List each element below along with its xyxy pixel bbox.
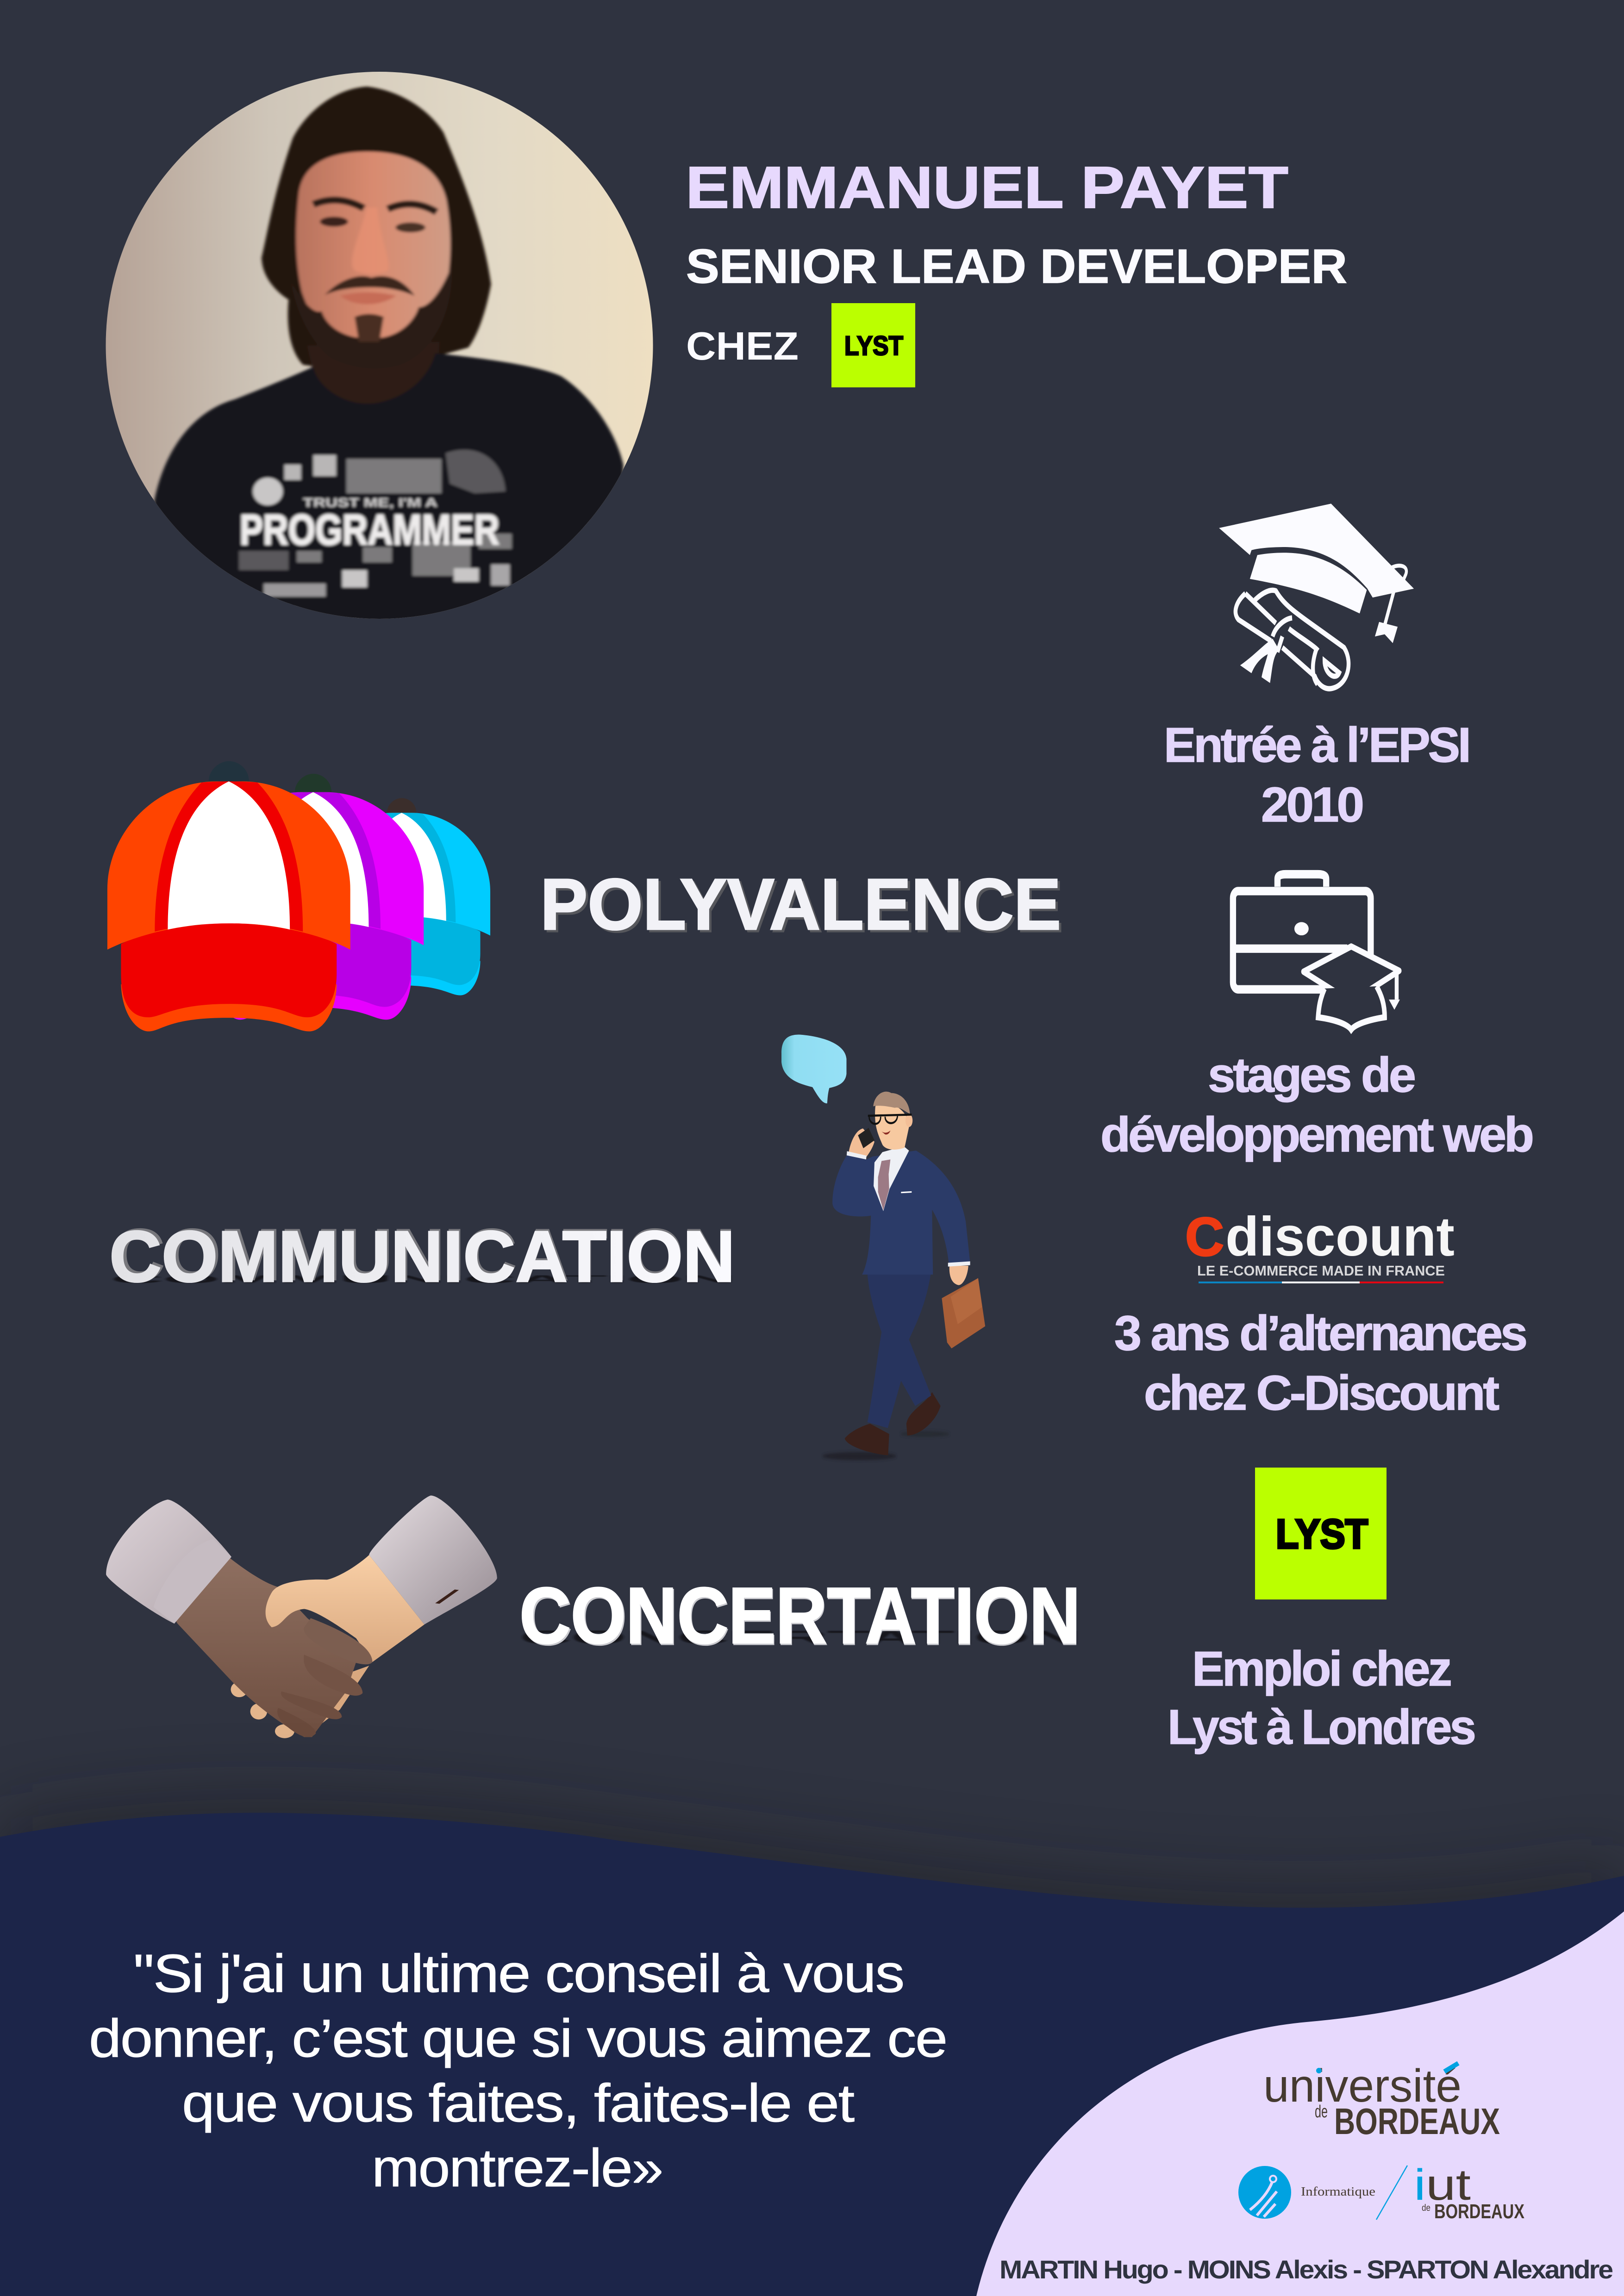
icon: briefcase with cap — [1233, 874, 1400, 1030]
small Lyst logo: LYST — [844, 331, 903, 361]
quote: que vous faites, faites-le et — [182, 2073, 855, 2133]
icon: businessman with speech bubble — [781, 1034, 985, 1460]
logo: iut de Bordeaux — [1414, 2160, 1524, 2223]
cyan cap — [313, 798, 490, 996]
name heading: EMMANUEL PAYET — [686, 155, 1288, 221]
apprenticeship label: 3 ans d’alternances — [1114, 1306, 1526, 1361]
large Lyst logo — [1255, 1468, 1387, 1599]
chin tuft — [355, 314, 384, 342]
jacket — [832, 1151, 970, 1275]
informatique label: Informatique — [1301, 2184, 1375, 2198]
red cap — [107, 761, 350, 1032]
eyes and brows — [313, 200, 437, 274]
beard — [291, 265, 452, 368]
logo: iut de Bordeaux: de — [1422, 2203, 1430, 2213]
education label: 2010 — [1261, 778, 1362, 832]
speech bubble — [781, 1034, 846, 1103]
employment label: Lyst à Londres — [1168, 1700, 1474, 1755]
concertation heading: CONCERTATION — [521, 1573, 1081, 1661]
communication heading: COMMUNICATION — [111, 1273, 735, 1285]
panel: lilac corner — [976, 1911, 1624, 2296]
portrait photo — [106, 72, 654, 622]
t-shirt — [154, 353, 623, 622]
logo: université de Bordeaux — [1263, 2060, 1500, 2142]
face — [296, 152, 450, 357]
neck — [307, 342, 439, 404]
hand and cuff — [949, 1266, 968, 1285]
ground shadows — [822, 1452, 897, 1460]
logo: université de Bordeaux: de — [1315, 2102, 1328, 2122]
quote: montrez-le» — [372, 2138, 662, 2198]
hand with phone — [849, 1128, 874, 1158]
quote: donner, c’est que si vous aimez ce — [89, 2008, 947, 2068]
polyvalence heading: POLYVALENCE — [543, 866, 1063, 947]
large Lyst logo: LYST — [1276, 1511, 1368, 1557]
t-shirt print: PROGRAMMER — [240, 506, 500, 554]
shirt and tie — [874, 1146, 909, 1211]
briefcase — [942, 1278, 985, 1348]
quote: "Si j'ai un ultime conseil à vous — [133, 1943, 904, 2004]
apprenticeship label — [1114, 1306, 1526, 1420]
employment label — [1168, 1642, 1474, 1755]
quote — [89, 1943, 947, 2198]
Cdiscount logo: C — [1185, 1207, 1224, 1268]
internships label: stages de — [1208, 1048, 1415, 1102]
concertation heading: CONCERTATION — [520, 1627, 1081, 1648]
lips — [340, 292, 396, 304]
authors credit: MARTIN Hugo - MOINS Alexis - SPARTON Alexandre — [999, 2255, 1613, 2284]
icon: handshake — [106, 1495, 497, 1738]
employment label: Emploi chez — [1192, 1642, 1451, 1696]
wave shadow — [0, 1799, 1624, 1990]
hair — [262, 87, 491, 367]
logo: informatique badge — [1238, 2166, 1291, 2219]
t-shirt print: TRUST ME, I'M A — [303, 496, 437, 510]
communication heading: COMMUNICATION — [109, 1216, 735, 1297]
dark hand — [174, 1558, 356, 1737]
internships label — [1100, 1048, 1532, 1162]
moustache — [325, 276, 415, 296]
Cdiscount logo: LE E-COMMERCE MADE IN FRANCE — [1197, 1263, 1445, 1279]
small Lyst logo — [831, 303, 915, 387]
logo: iut de Bordeaux: BORDEAUX — [1434, 2200, 1524, 2223]
concertation heading: CONCERTATION — [519, 1571, 1081, 1660]
magenta cap — [203, 774, 424, 1020]
logo: université de Bordeaux: université — [1263, 2060, 1462, 2112]
shoes — [845, 1424, 889, 1455]
logo divider — [1376, 2165, 1407, 2220]
chez label: CHEZ — [686, 324, 799, 368]
t-shirt print — [239, 450, 512, 597]
logo: université de Bordeaux: BORDEAUX — [1334, 2101, 1500, 2142]
dark fingers — [304, 1618, 372, 1664]
trousers — [868, 1275, 931, 1428]
head — [875, 1103, 909, 1150]
apprenticeship label: chez C-Discount — [1144, 1366, 1499, 1420]
logo: iut de Bordeaux: iut — [1414, 2160, 1471, 2209]
job title: SENIOR LEAD DEVELOPER — [686, 240, 1347, 293]
light fingers behind — [231, 1682, 248, 1697]
internships label: développement web — [1100, 1108, 1532, 1162]
education label: Entrée à l’EPSI — [1164, 718, 1469, 772]
Cdiscount logo: discount — [1225, 1206, 1455, 1268]
left cuff — [106, 1500, 231, 1624]
polyvalence heading: POLYVALENCE — [540, 864, 1061, 945]
education label — [1164, 718, 1469, 832]
icon: graduation cap and diploma — [1219, 504, 1414, 689]
icon: three stacked caps — [107, 761, 490, 1032]
right cuff — [369, 1495, 497, 1624]
panel: navy quote wave — [0, 1813, 1624, 2296]
light hand and thumb — [266, 1555, 425, 1662]
Cdiscount logo — [1185, 1206, 1455, 1283]
communication heading: COMMUNICATION — [112, 1214, 735, 1295]
